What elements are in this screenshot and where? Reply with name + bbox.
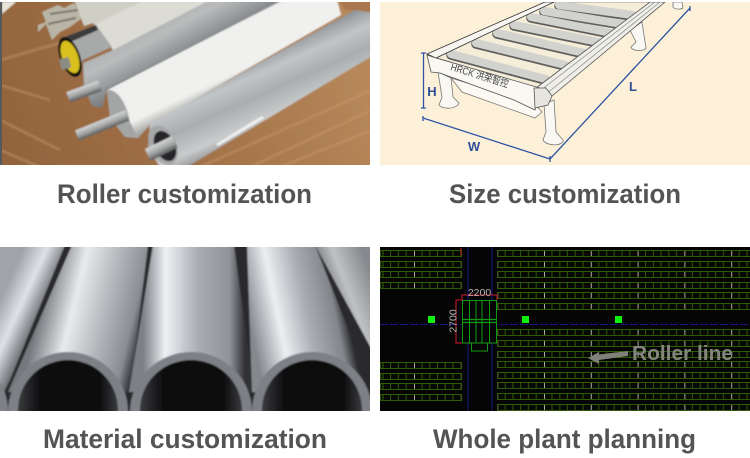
- dimension labels: L: [629, 79, 637, 94]
- conveyor logo: HRCK 洪荣智控: [449, 60, 510, 90]
- panel: size customization conveyor drawing: [380, 2, 750, 165]
- roller with yellow end: [53, 25, 112, 80]
- transfer machine: [462, 300, 497, 351]
- panel: whole plant planning CAD layout: [380, 247, 750, 411]
- roller 3: [83, 0, 285, 108]
- panel: material customization photo: [0, 247, 370, 411]
- caption: whole plant planning: Whole plant planning: [433, 424, 696, 454]
- rollers: [451, 5, 632, 80]
- green markers: [428, 316, 622, 323]
- arrow: [588, 351, 628, 364]
- caption: material customization: Material customization: [43, 424, 327, 454]
- dimension labels: H: [427, 84, 437, 99]
- conveyor bed: [427, 2, 650, 72]
- translucent roller: [74, 2, 142, 49]
- dimension text: 2700: [448, 309, 460, 333]
- dimension labels: [427, 79, 637, 154]
- conveyor legs: [438, 2, 683, 145]
- caption: size customization: Size customization: [449, 179, 681, 209]
- icon: sprocket: [38, 3, 82, 40]
- roller 4: [107, 0, 341, 138]
- aisle lines: [380, 247, 750, 411]
- dimension text: [448, 287, 491, 333]
- red dimension lines: [456, 248, 497, 343]
- panel: roller customization photo: [0, 0, 372, 170]
- caption: roller customization: Roller customization: [57, 179, 312, 209]
- roller line label: Roller line: [632, 343, 733, 365]
- dimension lines: [421, 6, 690, 162]
- dimension text: 2200: [468, 287, 491, 299]
- dimension labels: W: [468, 139, 481, 154]
- lower brace: [451, 78, 542, 118]
- frame rails: [427, 2, 665, 110]
- roller 5: [148, 10, 372, 167]
- rack rows right: [498, 250, 750, 410]
- rack rows left: [380, 250, 462, 400]
- pipe ends: [0, 351, 370, 411]
